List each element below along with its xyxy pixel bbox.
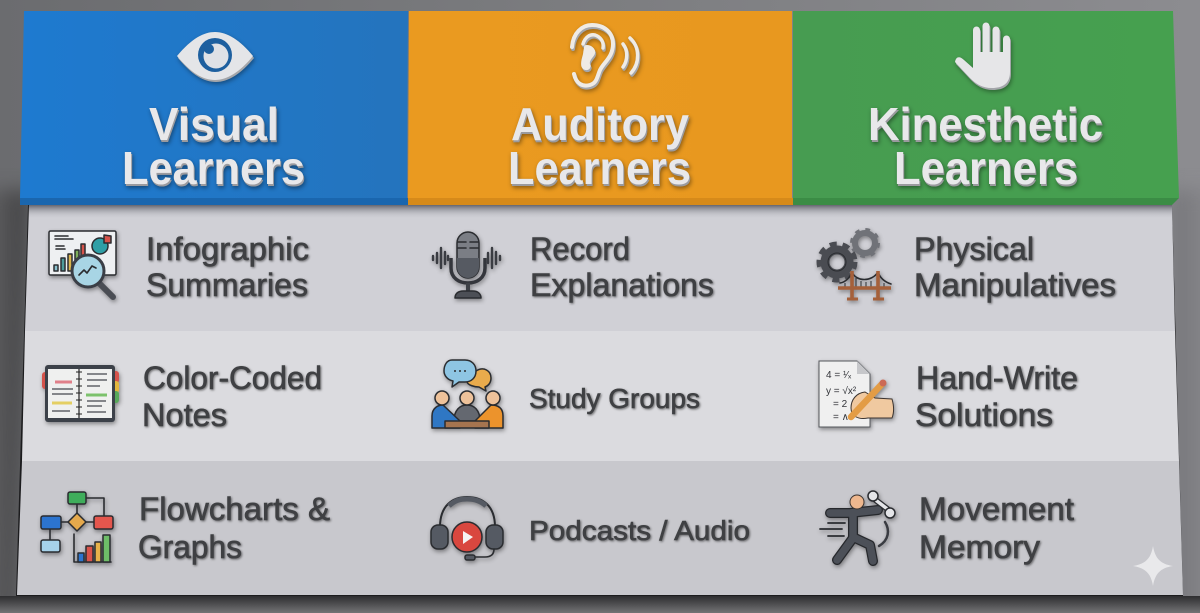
text: Flowcharts & Graphs — [138, 491, 330, 565]
text: Physical Manipulatives: Manipulatives — [914, 267, 1116, 303]
icon: microphone with sound waves — [433, 232, 500, 298]
text: Record Explanations — [530, 231, 714, 303]
row 2 background — [22, 331, 1179, 461]
text: Podcasts / Audio: Podcasts / Audio — [529, 515, 750, 546]
item: Infographic Summaries — [49, 231, 309, 303]
column header: kinesthetic learners — [793, 11, 1179, 205]
text: Movement Memory — [919, 491, 1074, 565]
text: Color-Coded Notes — [142, 360, 322, 433]
heading: Kinesthetic Learners: Learners — [894, 142, 1078, 194]
text: Color-Coded Notes: Notes — [142, 397, 227, 433]
panel: learning strategies table — [16, 205, 1183, 596]
text: Color-Coded Notes: Color-Coded — [143, 360, 322, 396]
item: Study Groups — [432, 360, 700, 428]
text: Flowcharts & Graphs: Graphs — [138, 529, 242, 565]
text: Record Explanations: Explanations — [530, 267, 714, 303]
text: Flowcharts & Graphs: Flowcharts & — [139, 491, 330, 527]
icon: math worksheet with writing hand: 4 = ¹⁄ₓ — [826, 370, 852, 381]
row 1 background — [25, 205, 1175, 331]
icon: eye — [177, 32, 253, 80]
icon: runner with wrench — [820, 491, 895, 561]
text: Movement Memory: Movement — [919, 491, 1074, 527]
text: Record Explanations: Record — [530, 231, 630, 267]
icon: gears and bridge — [819, 230, 891, 299]
row 3 background — [17, 461, 1183, 595]
text: Physical Manipulatives — [914, 231, 1116, 303]
item: Color-Coded Notes — [42, 360, 322, 433]
heading: Kinesthetic Learners: Kinesthetic — [868, 98, 1103, 150]
icon: ear with sound waves — [572, 25, 638, 86]
icon: color-coded notebook — [42, 365, 119, 422]
heading: Visual Learners — [122, 98, 305, 194]
heading: Auditory Learners — [508, 98, 691, 194]
item: Record Explanations — [433, 231, 714, 303]
text: Infographic Summaries: Infographic — [146, 231, 309, 267]
text: Infographic Summaries — [146, 231, 309, 303]
column header: auditory learners — [408, 11, 793, 205]
text: Hand-Write Solutions — [915, 360, 1078, 433]
text: Infographic Summaries: Summaries — [146, 267, 308, 303]
icon: flowchart and bar chart — [41, 492, 113, 562]
heading: Auditory Learners: Auditory — [511, 98, 689, 150]
icon: math worksheet with writing hand — [819, 361, 894, 427]
item: Flowcharts & Graphs — [41, 491, 330, 565]
text: Movement Memory: Memory — [919, 529, 1040, 565]
text: Hand-Write Solutions: Solutions — [915, 397, 1053, 433]
heading: Visual Learners: Visual — [149, 98, 279, 150]
icon: math worksheet with writing hand: y = √x² — [826, 385, 857, 397]
icon: math worksheet with writing hand: = ∧ — [833, 412, 849, 423]
heading: Visual Learners: Learners — [122, 142, 305, 194]
text: Study Groups: Study Groups — [529, 383, 700, 414]
item: Physical Manipulatives — [819, 230, 1116, 303]
heading: Kinesthetic Learners — [868, 98, 1103, 194]
icon: raised hand — [955, 26, 1010, 88]
text: Physical Manipulatives: Physical — [914, 231, 1034, 267]
item: Movement Memory — [820, 491, 1074, 565]
icon: group discussion — [432, 360, 503, 428]
icon: headphones with play button — [431, 497, 503, 560]
icon: chart board with magnifier — [49, 231, 116, 297]
header shadow on table — [29, 205, 1172, 219]
item: Hand-Write Solutions — [819, 360, 1078, 433]
column header: visual learners — [20, 11, 408, 205]
icon: math worksheet with writing hand: = 2 — [833, 399, 848, 410]
text: Hand-Write Solutions: Hand-Write — [916, 360, 1078, 396]
item: Podcasts / Audio — [431, 497, 750, 560]
icon: sparkle watermark — [1133, 546, 1173, 586]
heading: Auditory Learners: Learners — [508, 142, 691, 194]
